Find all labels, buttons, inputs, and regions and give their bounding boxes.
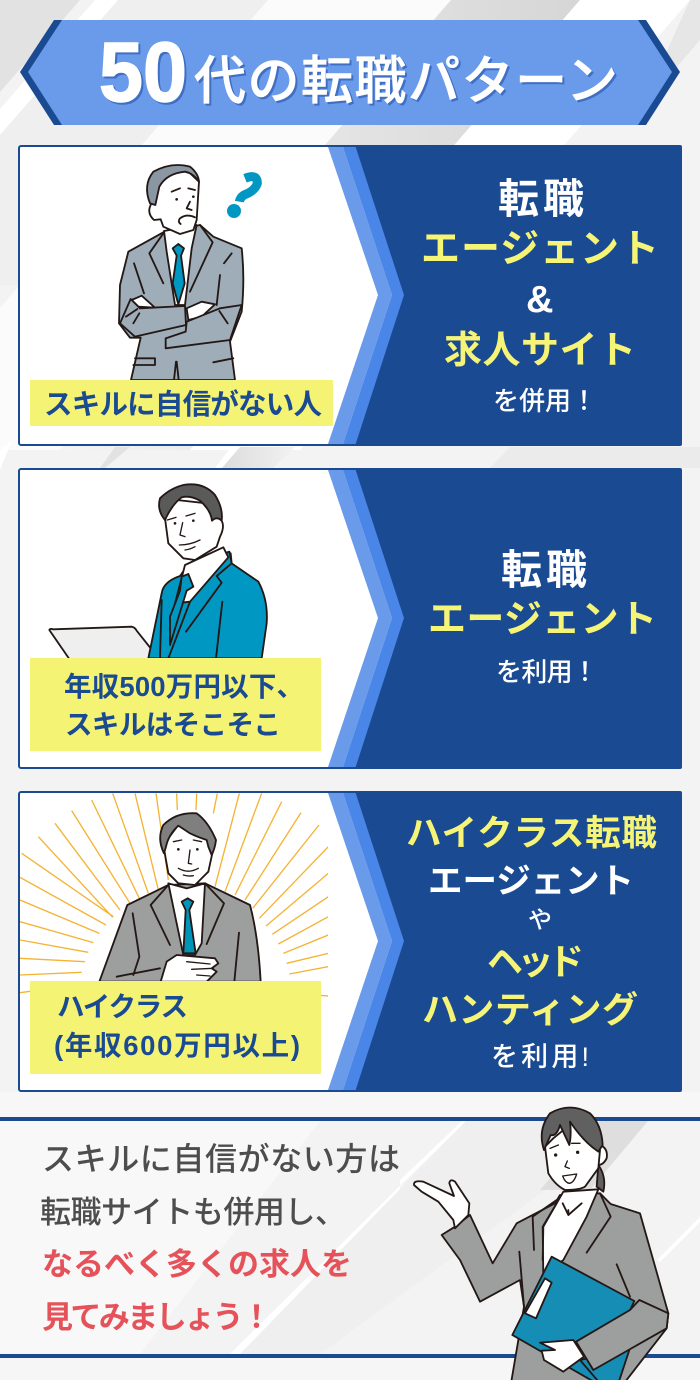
illustration: man in blue suit with tablet: [49, 484, 267, 660]
label: low skill confidence: スキルに自信がない人: [44, 388, 322, 421]
illustration: puzzled man with crossed arms: [119, 165, 257, 380]
recommendation text 3: や: [528, 907, 552, 934]
advice text: 転職サイトも併用し、: [40, 1195, 346, 1230]
advice text: [40, 1141, 400, 1335]
title text: 50: [99, 25, 187, 119]
title text: 代の転職パターン: [194, 53, 618, 111]
label: mid income: [30, 658, 321, 751]
advice text: スキルに自信がない方は: [42, 1141, 400, 1177]
title banner: [20, 20, 680, 125]
illustration: confident man in gray suit: [99, 813, 261, 982]
recommendation text 2: を利用！: [496, 657, 598, 687]
recommendation text 1: を併用！: [493, 386, 597, 416]
label: mid income: 年収500万円以下、: [64, 671, 304, 702]
recommendation text 1: エージェント: [421, 228, 659, 271]
chevron divider: [328, 791, 682, 1092]
recommendation text 3: ハンティング: [422, 989, 638, 1030]
label: high class: [30, 981, 321, 1074]
recommendation text 2: 転職: [501, 547, 587, 593]
label: low skill confidence: [30, 380, 333, 426]
chevron divider: [328, 145, 682, 446]
panel 2: mid income: [19, 468, 682, 769]
panel 3: high class: [19, 791, 682, 1092]
title text: [99, 25, 618, 119]
recommendation text 1: [421, 176, 659, 416]
recommendation text 1: 転職: [498, 176, 584, 222]
bottom advice band: [0, 1107, 700, 1380]
panel frame: [19, 469, 681, 768]
panel frame: [19, 792, 681, 1091]
recommendation text 2: [428, 547, 657, 687]
advice text: なるべく多くの求人を: [42, 1247, 352, 1282]
label: high class: ハイクラス: [57, 991, 188, 1022]
recommendation text 3: エージェント: [428, 863, 634, 901]
label: mid income: スキルはそこそこ: [65, 709, 281, 740]
recommendation text 2: エージェント: [428, 599, 657, 641]
recommendation text 3: ハイクラス転職: [406, 813, 657, 853]
panel 1: low skill confidence: [19, 145, 682, 446]
recommendation text 3: ヘッド: [487, 941, 584, 982]
recommendation text 1: &: [526, 279, 553, 321]
label: high class: (年収600万円以上): [54, 1030, 300, 1061]
recommendation text 1: 求人サイト: [444, 330, 636, 372]
band background: [0, 1117, 700, 1358]
recommendation text 3: を利用!: [491, 1042, 589, 1072]
sunburst rays: [20, 793, 328, 996]
chevron divider: [328, 468, 682, 769]
advice text: 見てみましょう！: [42, 1300, 272, 1335]
panel frame: [19, 146, 681, 445]
illustration: woman presenting with clipboard: [414, 1107, 668, 1380]
recommendation text 3: [406, 813, 657, 1072]
banner hexagon: [20, 20, 680, 125]
